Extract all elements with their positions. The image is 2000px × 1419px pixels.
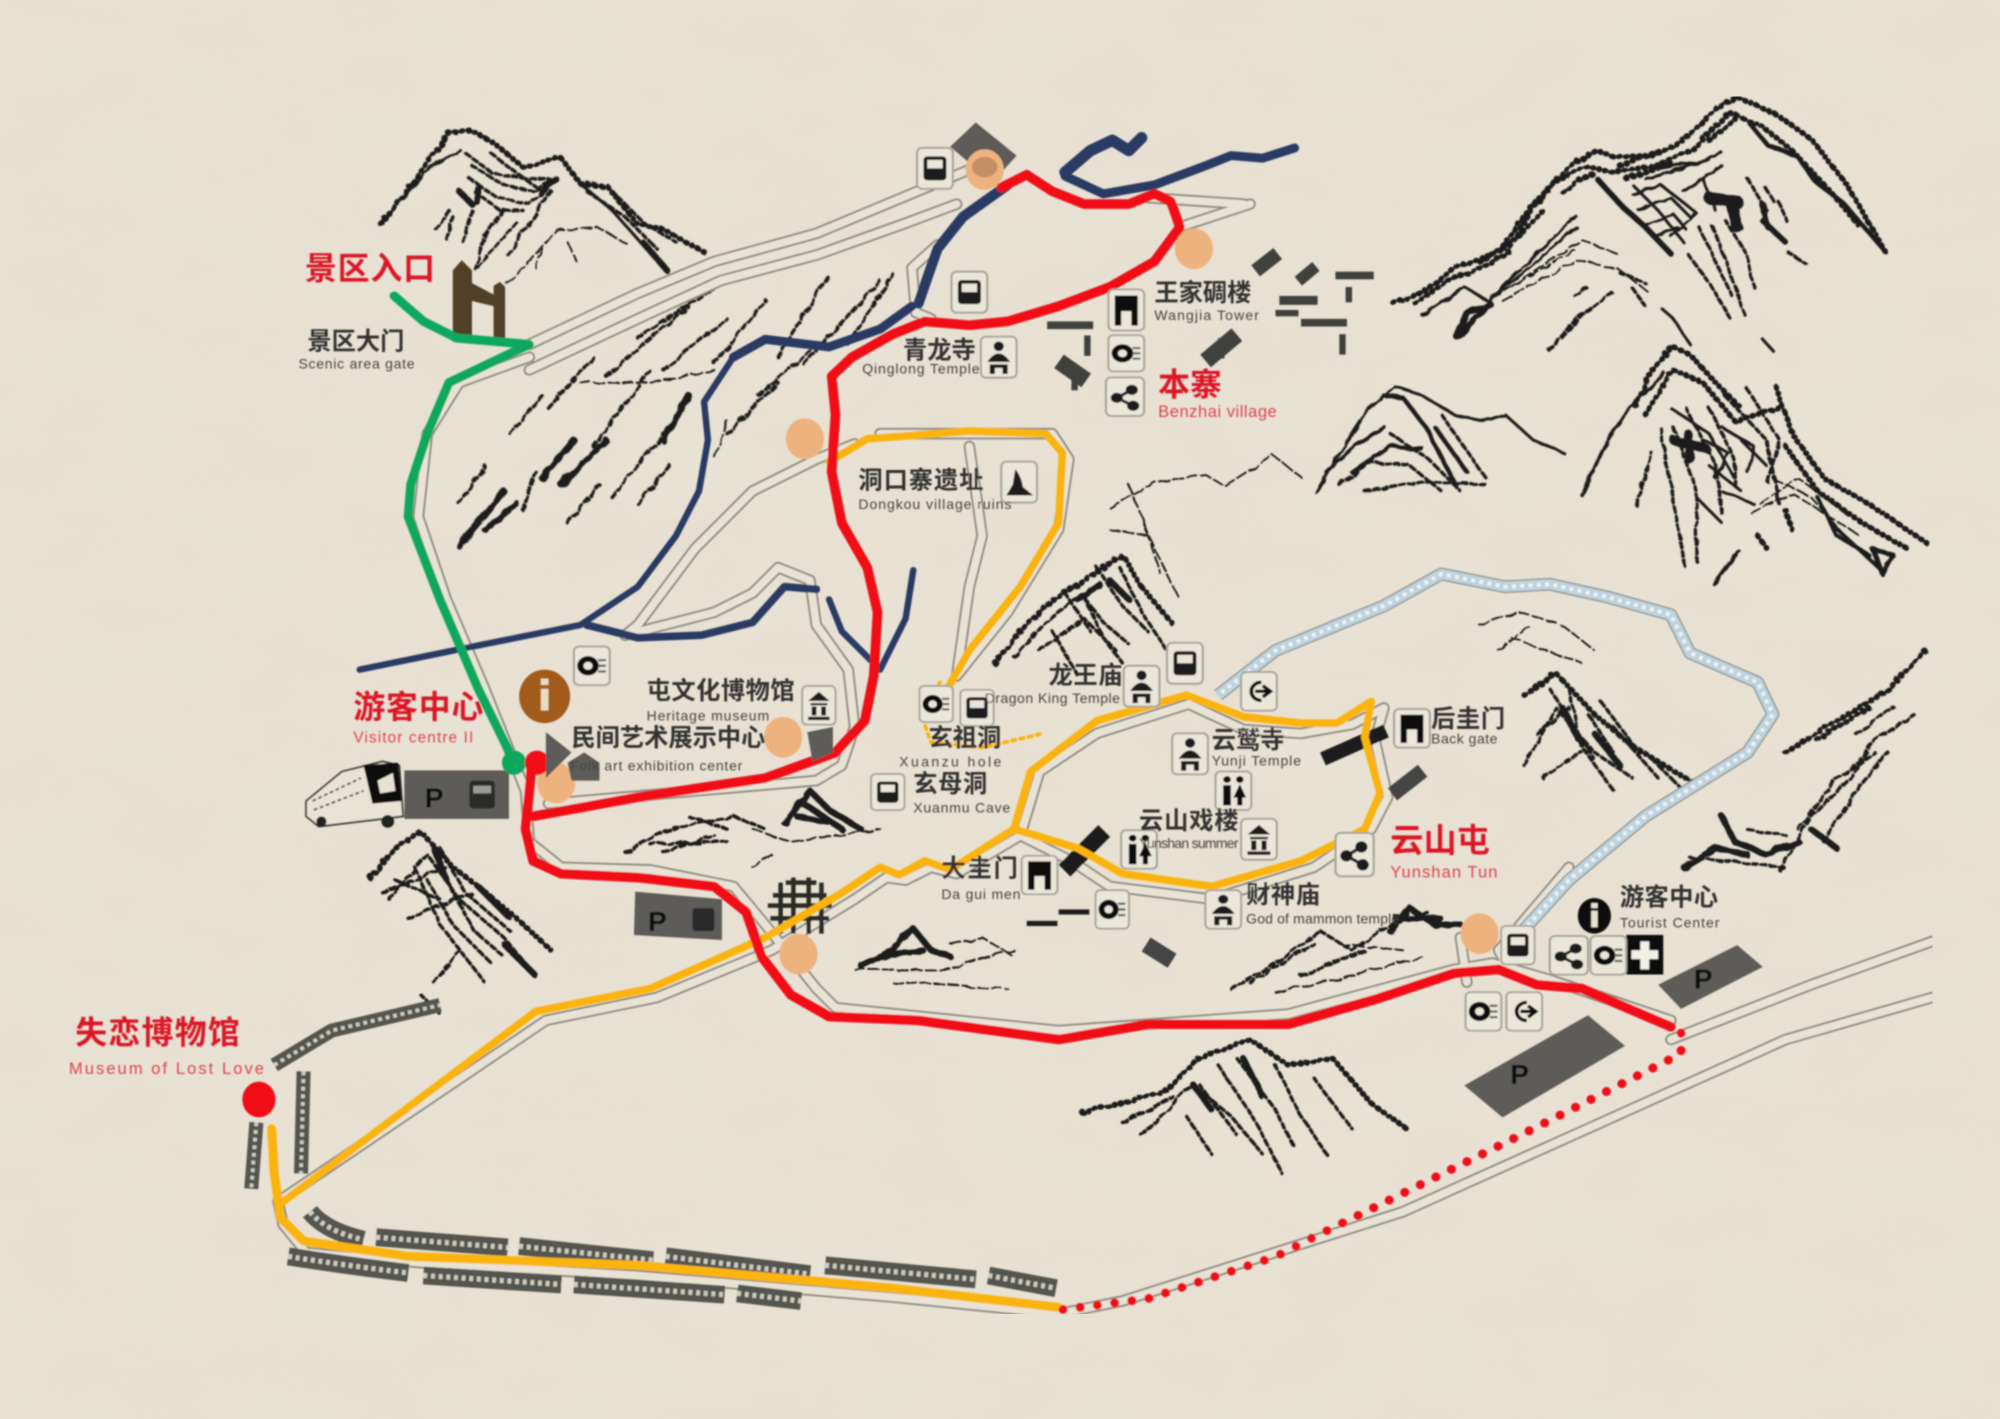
label: Yunji Temple: Yunji Temple (1212, 752, 1301, 768)
parking lot: small diagonal: P (1694, 964, 1713, 995)
label: Da gui men (941, 855, 1020, 902)
icon set (574, 148, 1626, 1031)
label: Da gui men: Da gui men (941, 886, 1020, 902)
mountain: small ridge beside gate (855, 927, 1014, 989)
label: Yunshan summer: 云山戏楼 (1139, 808, 1239, 835)
yellow route (272, 431, 1380, 1307)
red route (525, 175, 1671, 1040)
building blocks: gate area (1027, 725, 1427, 968)
label: Xuanmu Cave: 玄母洞 (913, 771, 987, 798)
bottom wall strips (251, 1005, 1056, 1301)
grey visitor centre buildings (546, 727, 833, 781)
label: Dongkou village ruins: Dongkou village ruins (858, 496, 1011, 512)
mountain: small ridge beside cave (625, 791, 880, 867)
building blocks: Benzhai village (1047, 248, 1374, 390)
label: Benzhai village: 本寨 (1158, 366, 1222, 402)
label: Yunshan summer: Yunshan summer (1139, 835, 1239, 851)
label: Benzhai village: Benzhai village (1158, 402, 1277, 421)
label: Dongkou village ruins (858, 468, 1011, 512)
memorial archway (768, 878, 832, 934)
label: Wangjia Tower: 王家碉楼 (1154, 280, 1251, 307)
label: Xuanzu hole (899, 725, 1001, 770)
parking lot: middle: P (648, 906, 667, 937)
mountain: low ridge near tourist centre (1231, 908, 1460, 992)
parking lot: top grey block (950, 122, 1017, 182)
label: Xuanzu hole: Xuanzu hole (899, 754, 1001, 770)
info marker: visitor centre (519, 670, 570, 723)
label: Museum of Lost Love: 失恋博物馆 (75, 1014, 240, 1050)
label: Tourist Center: Tourist Center (1620, 914, 1720, 930)
mountain: central small peak (995, 555, 1173, 676)
label: Museum of Lost Love: Museum of Lost Love (69, 1059, 264, 1078)
label: Da gui men: 大圭门 (941, 855, 1018, 882)
map artwork (69, 97, 1932, 1314)
label: Qinglong Temple (862, 337, 980, 377)
mountain: top right range (1394, 97, 1885, 351)
mountain: lower right range (1684, 651, 1926, 870)
mountain: back gate peak (1480, 612, 1696, 791)
mountain: bottom centre (1082, 1040, 1407, 1173)
hatch marks: hillside below main road (446, 274, 893, 546)
label: Dragon King Temple: Dragon King Temple (985, 690, 1120, 706)
label: Xuanzu hole: 玄祖洞 (929, 725, 1001, 752)
label: Xuanmu Cave (913, 771, 1010, 815)
green route (394, 296, 529, 775)
label: Tourist Center: 游客中心 (1620, 884, 1718, 912)
parking lot: visitor centre: P (425, 782, 443, 813)
label: God of mammon temple (1246, 882, 1399, 926)
parking lot: large diagonal (1464, 1015, 1625, 1117)
label: Benzhai village (1158, 366, 1277, 421)
mountain: lower left of visitor centre (370, 832, 551, 1014)
label: Yunshan summer (1139, 808, 1239, 851)
label: scenic area gate (298, 328, 415, 372)
label: Yunji Temple (1212, 728, 1301, 768)
scenic railway: blue dotted line (1218, 574, 1773, 950)
label: Wangjia Tower: Wangjia Tower (1154, 307, 1259, 323)
label: Heritage museum (647, 677, 795, 724)
label: Qinglong Temple: Qinglong Temple (862, 361, 980, 377)
mountain: upper left peak (380, 130, 708, 283)
label: Tourist Center (1620, 884, 1720, 930)
label: scenic area gate: Scenic area gate (298, 356, 415, 372)
parking lot: visitor centre (404, 770, 509, 819)
parking lot: middle (634, 892, 722, 940)
label: Yunji Temple: 云鹫寺 (1212, 728, 1284, 755)
label: Visitor centre: 游客中心 (353, 689, 484, 725)
label: Heritage museum: 屯文化博物馆 (647, 677, 795, 705)
label: Yunshan Tun: 云山屯 (1390, 823, 1490, 860)
parking lot: small diagonal (1658, 945, 1763, 1009)
Museum of Lost Love marker (242, 1082, 276, 1117)
label: Qinglong Temple: 青龙寺 (903, 337, 976, 364)
red dotted walking route (1061, 1033, 1681, 1310)
orange stop markers (537, 149, 1499, 974)
main road network (278, 163, 1932, 1314)
label: Visitor centre: Visitor centre II (353, 729, 473, 746)
tour bus (306, 761, 403, 828)
label: Heritage museum: Heritage museum (647, 708, 769, 724)
info marker: tourist centre (1578, 898, 1611, 934)
label: Xuanmu Cave: Xuanmu Cave (913, 799, 1010, 815)
parking lot: large diagonal: P (1510, 1059, 1529, 1090)
label: scenic area entrance: 景区入口 (305, 250, 435, 286)
label: Back gate: 后圭门 (1431, 706, 1505, 733)
mountain: centre right hill (1110, 386, 1564, 599)
icon: medical cross (1626, 935, 1663, 974)
label: Dongkou village ruins: 洞口寨遗址 (858, 468, 983, 495)
label: Visitor centre (353, 689, 484, 746)
scenic area gate (453, 260, 505, 342)
label: Yunshan Tun (1390, 823, 1497, 882)
river (360, 138, 1295, 670)
label: Wangjia Tower (1154, 280, 1259, 323)
label: Folk art exhibition center: Folk art exhibition center (570, 757, 743, 773)
label: Museum of Lost Love (69, 1014, 264, 1078)
label: Back gate: Back gate (1431, 731, 1498, 747)
label: Folk art exhibition center: 民间艺术展示中心 (571, 725, 765, 752)
label: God of mammon temple: God of mammon temple (1246, 910, 1399, 926)
label: scenic area gate: 景区大门 (307, 328, 404, 355)
label: Yunshan Tun: Yunshan Tun (1390, 863, 1497, 882)
mountain: right middle range (1582, 347, 1927, 584)
label: God of mammon temple: 财神庙 (1246, 882, 1320, 909)
label: Folk art exhibition center (570, 725, 765, 773)
label: Dragon King Temple (985, 663, 1122, 706)
label: Back gate (1431, 706, 1505, 747)
label: Dragon King Temple: 龙王庙 (1048, 663, 1122, 690)
